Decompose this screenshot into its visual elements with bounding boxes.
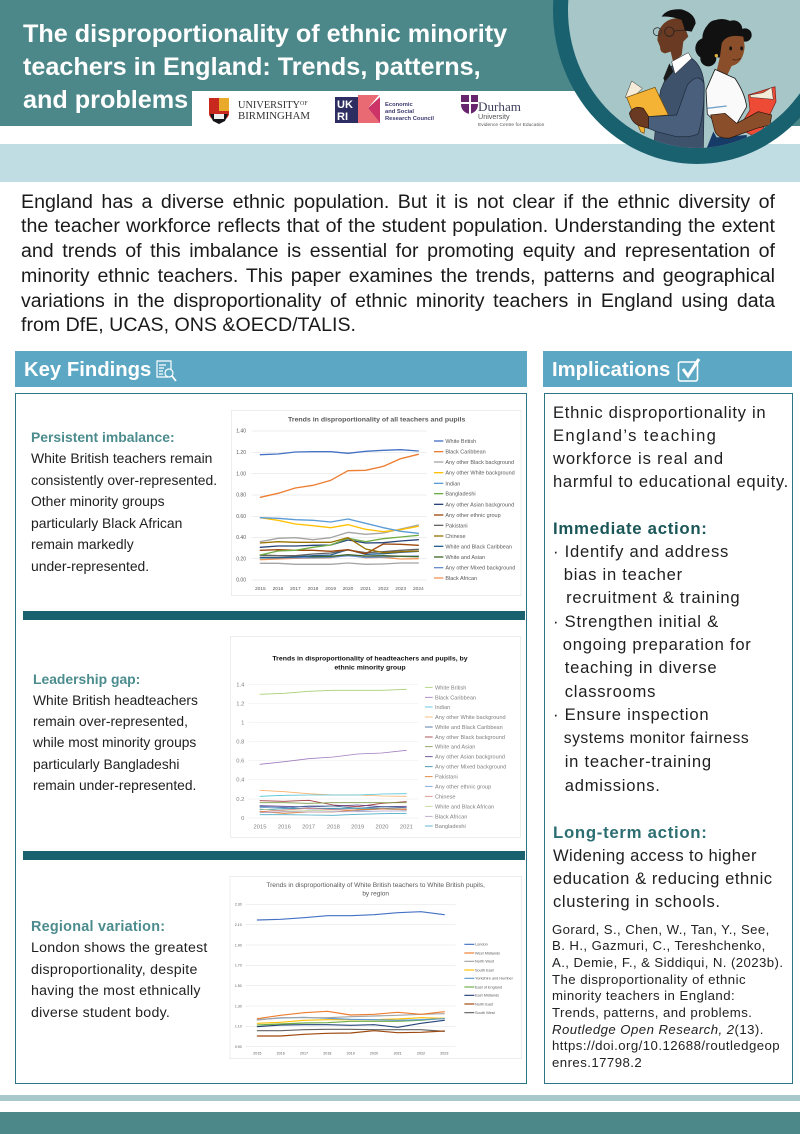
divider 1 [23,611,525,620]
logo: UKRI ESRC: RI [337,111,348,123]
chart: all teachers and pupils: 1.00 [236,471,246,477]
introduction text: minority ethnic teachers. This paper examines the trends, patterns and geographical [21,265,775,287]
chart: all teachers and pupils: 2020 [343,586,354,592]
chart: headteachers and pupils: Trends in disproportionality of headteachers and pupils, by [272,656,468,662]
chart: headteachers and pupils: 2017 [302,824,315,830]
logo: UKRI ESRC: UK [337,99,353,111]
chart: White British teachers by region: East Midlands [475,994,499,998]
chart: headteachers and pupils: 0.4 [236,778,245,784]
chart: all teachers and pupils: 2022 [378,586,389,592]
chart: White British teachers by region: South East [475,968,495,972]
man [625,9,704,150]
chart: headteachers and pupils: 2019 [351,824,364,830]
chart: all teachers and pupils: Bangladeshi [445,492,476,498]
chart: headteachers and pupils: White and Black Caribbean [435,725,503,731]
logo: University of Birmingham: BIRMINGHAM [238,111,310,122]
chart: headteachers and pupils: White and Black African [435,804,494,810]
chart: headteachers and pupils: 0.6 [236,759,244,765]
introduction text [21,190,776,336]
chart: headteachers and pupils: Black African [435,814,467,820]
chart: headteachers and pupils: Chinese [435,794,456,800]
chart: White British teachers by region: Yorkshire and Humber [475,977,514,981]
introduction text: and trends of this imbalance is essential for promoting equity and representation of [21,240,775,262]
chart: all teachers and pupils: 2016 [273,586,284,592]
chart: headteachers and pupils: 2018 [327,824,340,830]
chart: all teachers and pupils: Black Caribbean [445,450,486,456]
heading: Implications [543,351,792,387]
citation: Gorard, S., Chen, W., Tan, Y., See, B. H., Gazmuri, C., Tereshchenko, A., Demie, F., & Siddiqui, N. (2023b). The disproportionality of ethnic minority teachers in England: Trends, patterns, and problems. Routledge Open Research, 2(13). https://doi.org/10.12688/routledgeop enres.17798.2 [552,922,783,1070]
chart: all teachers and pupils: Chinese [445,534,466,540]
chart: White British teachers by region: East of England [475,985,502,989]
chart: all teachers and pupils: White British [445,439,476,445]
introduction text: the teacher workforce reflects that of the student population. Understanding the extent [21,215,775,237]
logo: Durham University [461,95,545,128]
chart: White British teachers by region: by region [362,892,389,898]
chart: headteachers and pupils: Any other Black background [435,735,505,741]
chart: White British teachers by region: 2020 [370,1051,378,1055]
chart: all teachers and pupils: Indian [445,481,460,487]
chart: all teachers and pupils: 2018 [308,586,319,592]
logo: Durham University: Durham [478,99,521,114]
chart: headteachers and pupils [230,636,521,838]
chart: all teachers and pupils: 2019 [325,586,336,592]
chart: all teachers and pupils: 0.40 [236,535,246,541]
chart: all teachers and pupils: 0.80 [236,493,246,499]
chart: White British teachers by region: 1.90 [235,943,242,947]
chart: White British teachers by region: 2023 [440,1051,448,1055]
heading: Implications: Implications [552,359,670,381]
chart: all teachers and pupils [231,410,522,596]
chart: White British teachers by region: 2015 [253,1051,261,1055]
introduction text: from DfE, UCAS, ONS &OECD/TALIS. [21,314,356,336]
implications: long-term action: Long-term action: Widening access to higher education & reducing ethnic clustering in schools. [553,822,773,911]
chart: headteachers and pupils: Any other White background [435,715,506,721]
chart: all teachers and pupils: 2024 [413,586,424,592]
logo: University of Birmingham [209,98,310,124]
chart: all teachers and pupils: Any other Mixed background [445,566,515,572]
logo: University of Birmingham: UNIVERSITY [238,100,300,111]
chart: all teachers and pupils: 0.60 [236,514,246,520]
chart: all teachers and pupils: Any other ethnic group [445,513,501,519]
chart: White British teachers by region: 0.90 [235,1045,242,1049]
chart: White British teachers by region: West Midlands [475,951,500,955]
chart: headteachers and pupils: Bangladeshi [435,824,466,830]
logo: UKRI ESRC: Research Council [385,116,434,122]
chart: all teachers and pupils: Any other White background [445,471,515,477]
finding: leadership gap: Leadership gap: White British headteachers remain over-represented, while most minority groups particularly Bangladeshi remain under-represented. [33,670,198,793]
implications: immediate action: Immediate action: · Identify and address bias in teacher recruitment & training · Strengthen initial & ongoing preparation for teaching in diverse classrooms · Ensure inspection systems monitor fairness in teacher-training admissions. [553,518,752,795]
chart: headteachers and pupils: White and Asian [435,745,475,751]
chart: White British teachers by region: London [475,943,488,947]
chart: White British teachers by region [230,876,522,1059]
chart: headteachers and pupils: Black Caribbean [435,695,476,701]
implications: summary: Ethnic disproportionality in England’s teaching workforce is real and harmful to educational equity. [553,402,789,491]
chart: headteachers and pupils: 1.2 [236,701,244,707]
chart: all teachers and pupils: White and Black Caribbean [445,544,512,550]
introduction text: England has a diverse ethnic population. But it is not clear if the ethnic diversity of [21,190,775,212]
chart: all teachers and pupils: 2017 [290,586,301,592]
chart: headteachers and pupils: 2015 [254,824,266,830]
chart: all teachers and pupils: 0.20 [236,556,246,562]
chart: all teachers and pupils: White and Asian [445,555,485,561]
chart: all teachers and pupils: 2023 [395,586,406,592]
heading: Key Findings: Key Findings [24,359,151,381]
logo: University of Birmingham: OF [300,101,308,107]
chart: White British teachers by region: 2.30 [235,903,242,907]
chart: White British teachers by region: 2017 [300,1051,308,1055]
chart: White British teachers by region: 2021 [394,1051,402,1055]
chart: headteachers and pupils: Pakistani [435,775,458,781]
chart: headteachers and pupils: White British [435,685,466,691]
chart: White British teachers by region: 1.30 [235,1004,242,1008]
logo: Durham University: University [478,112,510,121]
pale blue band [0,144,800,182]
chart: headteachers and pupils: 0.8 [236,740,244,746]
chart: headteachers and pupils: ethnic minority group [334,666,406,672]
divider 2 [23,851,525,860]
logo strip background [192,91,622,126]
chart: headteachers and pupils: Indian [435,705,450,711]
chart: White British teachers by region: 1.10 [235,1025,242,1029]
chart: all teachers and pupils: 0.00 [236,578,246,584]
chart: headteachers and pupils: 2021 [400,824,413,830]
chart: headteachers and pupils: Any other Asian background [435,755,505,761]
heading: Key Findings [15,351,527,387]
logo: UKRI ESRC: and Social [385,109,414,115]
icon: checkbox [678,358,700,382]
chart: White British teachers by region: 1.50 [235,984,242,988]
introduction text: variations in the disproportionality of ethnic minority teachers in England using data [21,290,775,312]
chart: all teachers and pupils: Black African [445,576,477,582]
chart: headteachers and pupils: Any other ethnic group [435,784,491,790]
finding: persistent imbalance: Persistent imbalance: White British teachers remain consistently over-represented. Other minority groups particularly Black African remain markedly under-represented. [31,428,217,574]
header banner [0,0,800,126]
chart: headteachers and pupils: 1.4 [236,682,245,688]
icon: document with magnifier [156,360,177,382]
finding: regional variation: Regional variation: London shows the greatest disproportionality, despite having the most ethnically diverse student body. [31,918,208,1021]
chart: all teachers and pupils: Trends in disproportionality of all teachers and pupils [288,416,466,423]
panel: key findings [15,393,527,1084]
chart: all teachers and pupils: Pakistani [445,523,468,529]
title: The disproportionality of ethnic minority teachers in England: Trends, patterns, and problems [23,20,507,114]
logo: UKRI ESRC [335,95,434,123]
chart: White British teachers by region: 1.70 [235,964,242,968]
logo: UKRI ESRC: Economic [385,102,413,108]
chart: White British teachers by region: North East [475,1002,494,1006]
chart: headteachers and pupils: 2016 [278,824,291,830]
chart: headteachers and pupils: Any other Mixed background [435,765,506,771]
chart: headteachers and pupils: 0.2 [236,797,244,803]
chart: White British teachers by region: 2022 [417,1051,425,1055]
chart: White British teachers by region: 2018 [323,1051,331,1055]
footer stripe light [0,1095,800,1101]
chart: White British teachers by region: South West [475,1011,496,1015]
chart: all teachers and pupils: 2015 [255,586,266,592]
chart: White British teachers by region: 2016 [277,1051,285,1055]
chart: all teachers and pupils: 1.20 [236,450,246,456]
woman [695,19,776,150]
chart: headteachers and pupils: 1 [241,721,244,727]
chart: all teachers and pupils: Any other Black background [445,460,514,466]
chart: White British teachers by region: Trends in disproportionality of White British teachers to White British pupils, [266,883,485,889]
chart: White British teachers by region: 2019 [347,1051,355,1055]
chart: headteachers and pupils: 2020 [376,824,389,830]
chart: all teachers and pupils: 2021 [360,586,371,592]
chart: all teachers and pupils: Any other Asian background [445,502,514,508]
chart: White British teachers by region: North West [475,960,495,964]
footer band [0,1112,800,1134]
chart: all teachers and pupils: 1.40 [236,429,246,435]
chart: White British teachers by region: 2.10 [235,923,242,927]
illustration: teachers with books in oval [553,0,800,164]
panel: implications [544,393,793,1084]
chart: headteachers and pupils: 0 [241,816,245,822]
logo: Durham University: Evidence Centre for Education [478,122,545,128]
